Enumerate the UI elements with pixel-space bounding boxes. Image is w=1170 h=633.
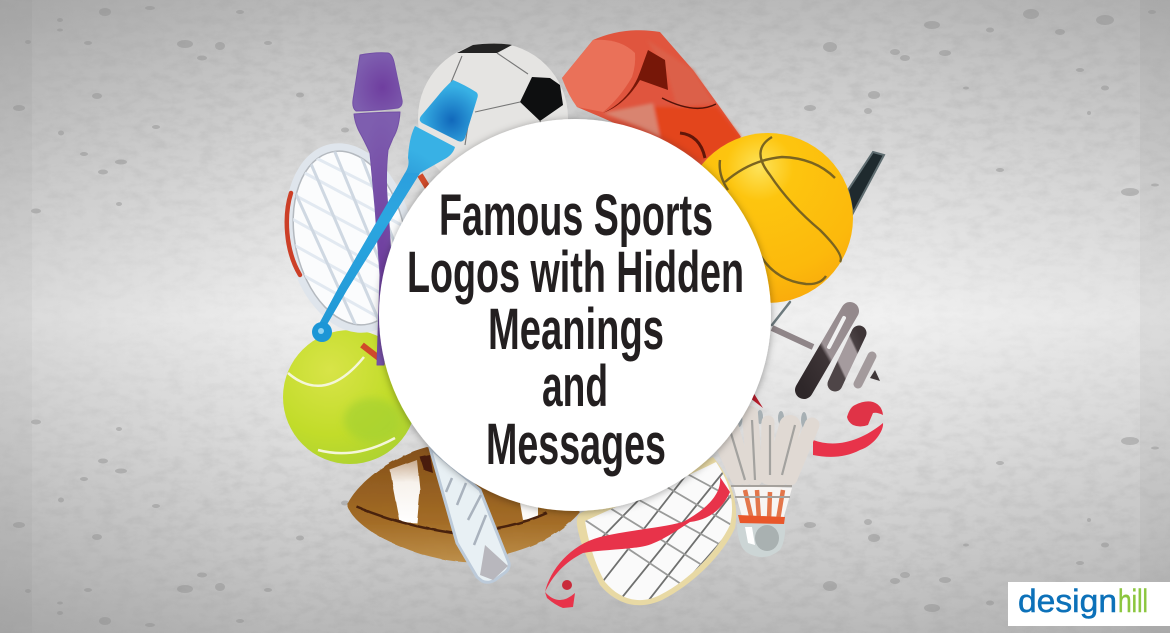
title: Famous Sports [439, 183, 713, 248]
icon: soccer ball [418, 43, 568, 193]
icon: blue gymnastic club [312, 80, 478, 342]
title [407, 183, 744, 477]
title: Messages [486, 412, 666, 477]
title: and [542, 354, 608, 419]
logo: designhill [1008, 582, 1170, 626]
title: Meanings [488, 297, 664, 362]
icon: tennis ball [283, 330, 417, 464]
icon: american football [348, 447, 580, 562]
icon: shuttlecock [717, 410, 812, 557]
icon: basketball [683, 133, 853, 303]
icon: badminton racket [577, 457, 745, 605]
icon: barbell and dumbbell [772, 152, 884, 390]
icon: boxing glove [562, 30, 741, 172]
title: Logos with Hidden [407, 240, 744, 305]
panel: central white circle [379, 119, 771, 511]
logo: designhill: design [1018, 583, 1117, 619]
icon: tennis racket [284, 143, 429, 360]
icon: red ribbon [545, 392, 883, 608]
icon: bat handle [430, 448, 509, 582]
icon: purple gymnastic club [353, 53, 402, 365]
logo: designhill: hill [1118, 583, 1148, 619]
